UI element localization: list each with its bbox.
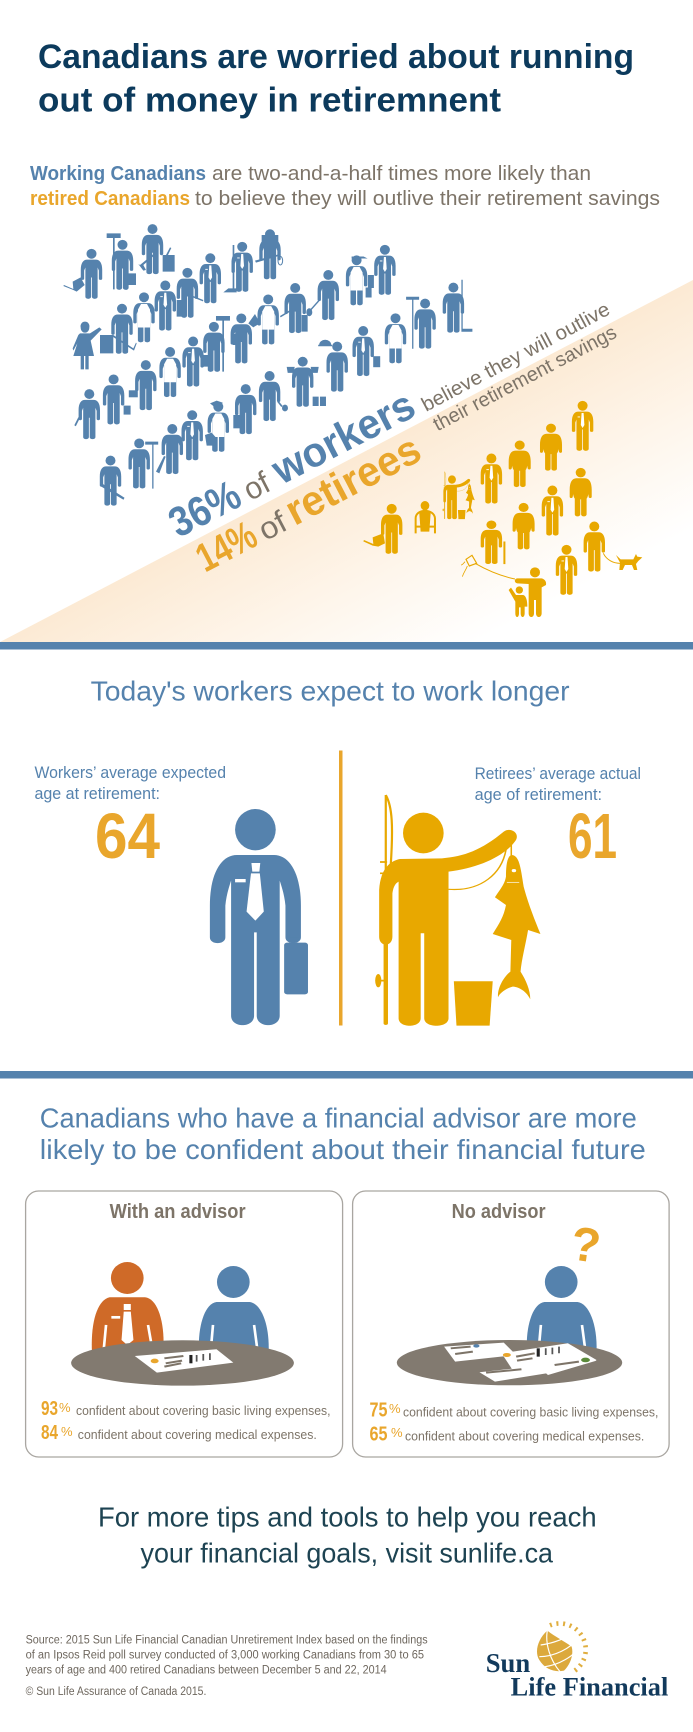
- icon: businessman with briefcase: [352, 326, 380, 376]
- stat text: confident about covering basic living expenses,: [403, 1406, 658, 1420]
- callout: believe they will outlive: believe they will outlive: [418, 298, 614, 416]
- icon: cook with utensil: [280, 283, 308, 333]
- panel: with an advisor: [26, 1191, 343, 1457]
- call to action: For more tips and tools to help you reach: [98, 1502, 597, 1533]
- icon: businessman with briefcase: [368, 245, 396, 295]
- icon: worker in suit: [200, 253, 221, 303]
- icon: retiree in wheelchair: [416, 501, 435, 533]
- stat text: confident about covering basic living expenses,: [76, 1404, 330, 1418]
- group of retired Canadians: [363, 401, 642, 617]
- icon: large retiree fishing: [375, 795, 540, 1026]
- callout: 36% of workers: workers: [263, 381, 422, 494]
- icon: hiker with backpack: [255, 229, 283, 279]
- number: 64: 64: [95, 800, 160, 872]
- heading: financial advisor confidence: Canadians who have a financial advisor are more: [40, 1103, 637, 1134]
- stat: 75%: 75: [370, 1400, 388, 1422]
- stat percent sign: %: [391, 1425, 403, 1440]
- panel heading: No advisor: [452, 1201, 546, 1223]
- icon: grandparent flying kite: [461, 555, 546, 617]
- icon: mechanic with wrench: [74, 389, 100, 439]
- icon: worker with whisk: [306, 270, 339, 320]
- icon: retiree with watering can: [363, 504, 402, 554]
- icon: question mark: ?: [567, 1217, 604, 1274]
- callout: 14% of retirees: of: [252, 504, 293, 548]
- icon: retiree in suit: [542, 486, 563, 536]
- gradient wedge background: [0, 280, 693, 642]
- source note: of an Ipsos Reid poll survey conducted of 3,000 working Canadians from 30 to 65: [26, 1649, 424, 1661]
- icon: painter with roller: [406, 297, 436, 349]
- intro text: are two-and-a-half times more likely than: [212, 163, 591, 185]
- intro text: to believe they will outlive their retirement savings: [195, 188, 660, 210]
- text: retirees' actual age: age of retirement:: [475, 785, 602, 804]
- icon: worker with toolbox: [129, 360, 157, 410]
- icon: retiree walking dog: [584, 522, 642, 572]
- stat: 93%: 93: [41, 1398, 58, 1420]
- callout: their retirement savings: their retirement savings: [430, 322, 620, 436]
- stat percent sign: %: [61, 1424, 73, 1439]
- icon: worker with tool: [156, 424, 183, 474]
- callout: 36% of workers: [161, 381, 422, 546]
- source note: [26, 1634, 428, 1698]
- icon: worker with bucket: [103, 374, 131, 424]
- icon: painter with roller: [107, 233, 136, 290]
- icon: worker with whisk: [259, 371, 288, 421]
- stat: 65%: 65: [370, 1424, 388, 1446]
- number: 61: 61: [568, 800, 617, 872]
- stat: 84%: 84: [41, 1422, 59, 1444]
- section divider bar 2: [0, 1071, 693, 1078]
- icon: retiree: [570, 468, 592, 516]
- callout: 36% of workers: of: [237, 465, 276, 507]
- icon: worker with saw: [100, 456, 124, 506]
- icon: retiree in suit: [572, 401, 593, 451]
- icon: worker in suit: [182, 337, 208, 387]
- illustration: advisor and client at table: [71, 1262, 294, 1386]
- icon: labourer with cap: [205, 401, 229, 452]
- text: retirees' actual age: Retirees’ average actual: [475, 764, 641, 783]
- callout: 14% of retirees: retirees: [277, 425, 428, 534]
- callout: 36% of workers: 36%: [161, 471, 248, 546]
- logo word: Life Financial: Life Financial: [511, 1673, 668, 1702]
- icon: worker in apron with helmet: [257, 294, 279, 345]
- section divider bar 1: [0, 642, 693, 650]
- icon: cleaner with vacuum: [100, 304, 137, 354]
- divider: vertical line: [339, 750, 342, 1026]
- icon: worker in apron: [159, 347, 181, 397]
- icon: painter: [203, 316, 230, 372]
- source note: years of age and 400 retired Canadians between December 5 and 22, 2014: [26, 1664, 387, 1676]
- source note: Source: 2015 Sun Life Financial Canadian Unretirement Index based on the findings: [26, 1634, 428, 1646]
- heading: financial advisor confidence: [40, 1103, 646, 1165]
- icon: woman in dress: [73, 322, 102, 369]
- icon: janitor with mop: [443, 280, 472, 333]
- intro text: [30, 163, 660, 210]
- call to action: [98, 1502, 597, 1569]
- logo: Sun Life Financial: [486, 1623, 668, 1702]
- title: Canadians are worried about running: [38, 38, 634, 76]
- logo word: Sun: Sun: [486, 1648, 530, 1678]
- icon: worker with bucket: [233, 384, 256, 434]
- icon: janitor with mop: [223, 242, 253, 292]
- text: workers' expected age: age at retirement:: [34, 784, 160, 803]
- callout: 14% of retirees: [187, 425, 428, 581]
- icon: worker in suit: [181, 410, 203, 460]
- stat percent sign: %: [389, 1401, 401, 1416]
- call to action: your financial goals, visit sunlife.ca: [140, 1538, 553, 1569]
- stat text: confident about covering medical expenses.: [405, 1430, 644, 1444]
- icon: retiree in suit: [556, 545, 577, 595]
- icon: retiree: [509, 441, 531, 487]
- crowd of working Canadians: [63, 224, 472, 506]
- stat text: confident about covering medical expenses.: [78, 1428, 317, 1442]
- icon: large worker with briefcase: [210, 809, 308, 1025]
- text: workers' expected age: Workers’ average expected: [34, 763, 226, 782]
- icon: retiree: [513, 503, 535, 549]
- stat percent sign: %: [59, 1400, 71, 1415]
- icon: labourer with cap: [346, 255, 372, 306]
- heading: today's workers expect to work longer: Today's workers expect to work longer: [91, 676, 570, 707]
- source note: © Sun Life Assurance of Canada 2015.: [26, 1686, 206, 1698]
- intro text: retired Canadians: [30, 188, 190, 210]
- text: retirees' actual age: [475, 764, 641, 804]
- icon: gardener with plants: [287, 357, 326, 407]
- illustration: client alone with papers: [397, 1266, 622, 1385]
- icon: worker in apron: [133, 292, 155, 342]
- icon: waiter with tray: [318, 340, 348, 392]
- icon: worker: [177, 268, 203, 318]
- title: [38, 38, 634, 120]
- icon: worker with tool: [231, 313, 260, 363]
- icon: worker in apron: [385, 313, 406, 364]
- icon: painter with roller: [128, 438, 158, 489]
- text: workers' expected age: [34, 763, 226, 803]
- logo globe: [537, 1623, 586, 1672]
- intro text: Working Canadians: [30, 163, 206, 185]
- icon: retiree fishing: [443, 472, 475, 519]
- panel: no advisor: [353, 1191, 669, 1457]
- title: out of money in retiremnent: [38, 82, 501, 120]
- icon: retiree with cane: [481, 520, 505, 564]
- callout: 14% of retirees: 14%: [189, 513, 264, 581]
- panel heading: With an advisor: [110, 1201, 246, 1223]
- icon: worker with watering can: [63, 249, 102, 299]
- icon: retiree: [540, 424, 562, 471]
- icon: cleaner with vacuum: [138, 224, 175, 274]
- icon: retiree in suit: [481, 454, 502, 504]
- icon: worker in suit: [155, 281, 176, 331]
- icon: child: [509, 586, 527, 617]
- heading: financial advisor confidence: likely to be confident about their financial future: [40, 1134, 646, 1165]
